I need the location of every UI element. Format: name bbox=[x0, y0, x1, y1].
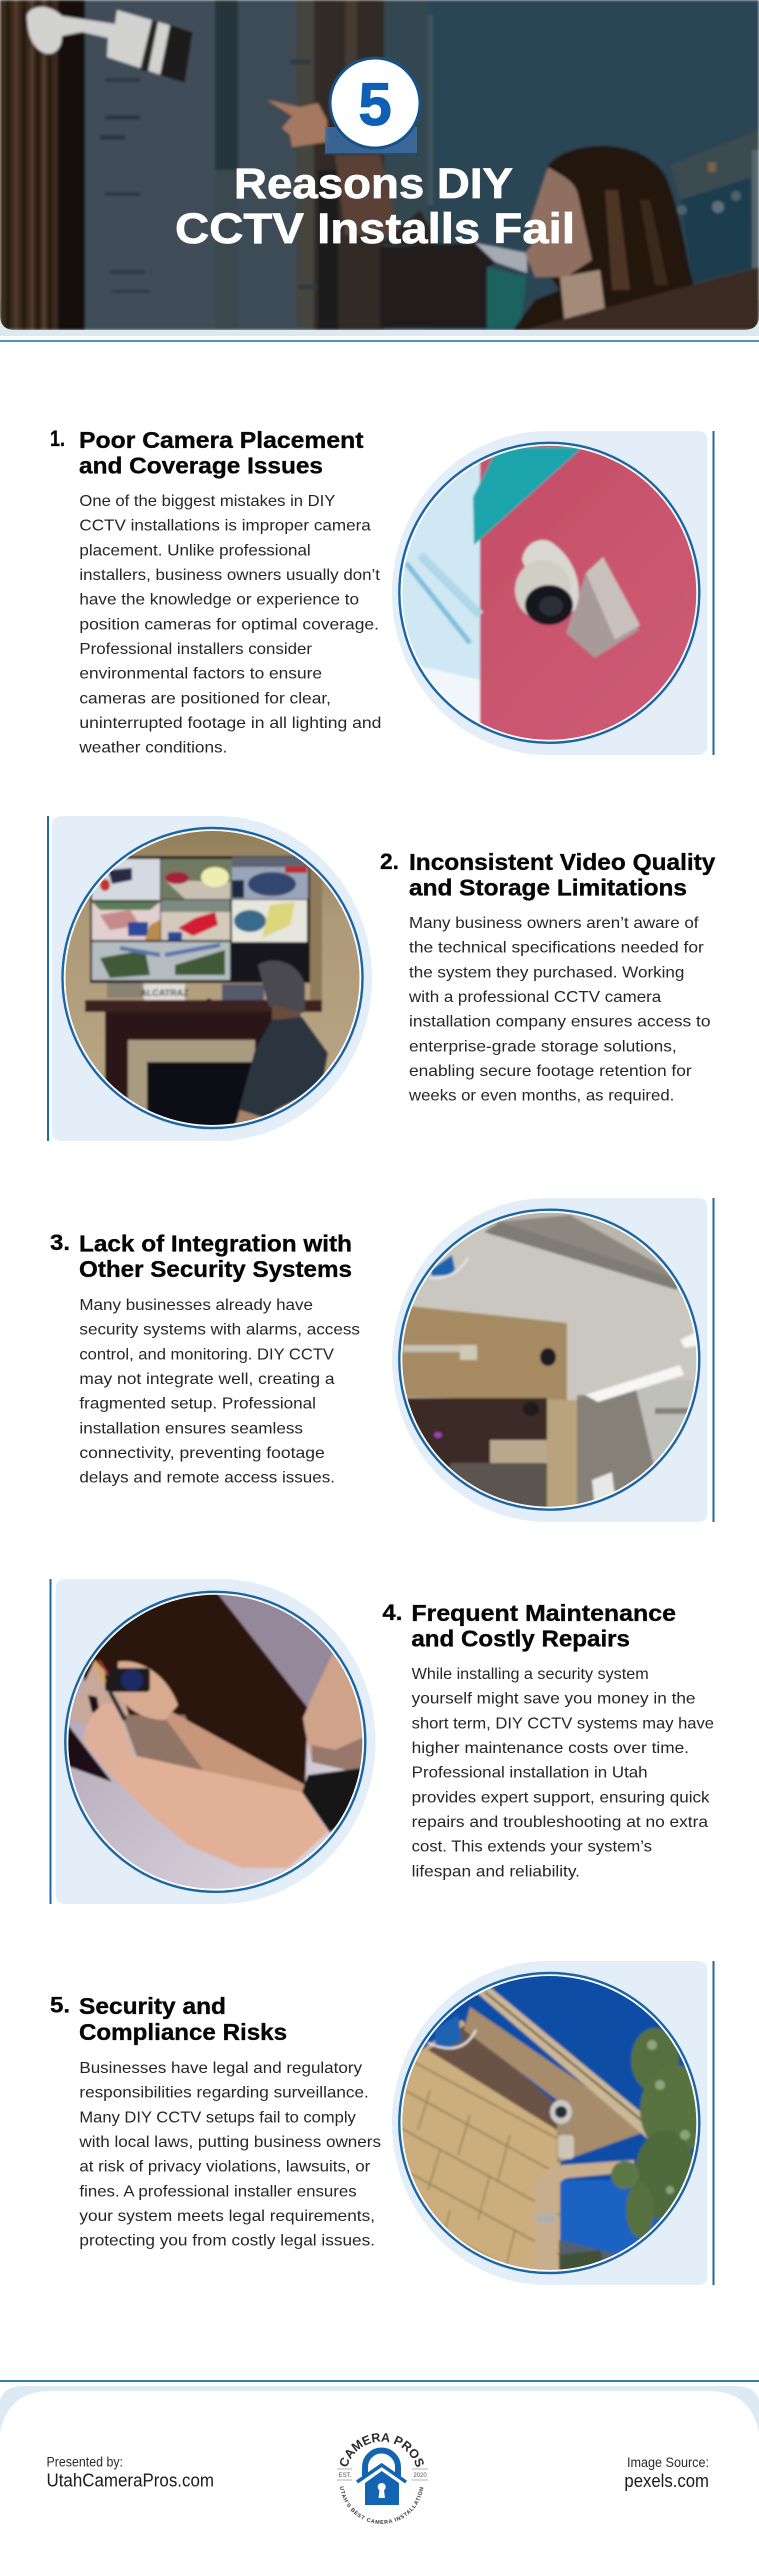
body text 1: One of the biggest mistakes in DIY bbox=[79, 493, 336, 510]
logo: Camera Pros: EST. bbox=[339, 2473, 352, 2479]
body text 2: with a professional CCTV camera bbox=[408, 989, 661, 1006]
body text 5: with local laws, putting business owners bbox=[78, 2134, 381, 2151]
body text 1: uninterrupted footage in all lighting and bbox=[79, 715, 381, 732]
title: Reasons DIY bbox=[234, 160, 513, 208]
body text 3: fragmented setup. Professional bbox=[79, 1396, 316, 1413]
footer bbox=[0, 2380, 759, 2524]
body text 3: delays and remote access issues. bbox=[79, 1470, 335, 1487]
hero photo: camera and woman pointing bbox=[0, 0, 759, 330]
presented by: Presented by: bbox=[46, 2455, 123, 2470]
body text 4: lifespan and reliability. bbox=[412, 1864, 580, 1880]
body text 3: Many businesses already have bbox=[79, 1297, 313, 1314]
body text 4: repairs and troubleshooting at no extra bbox=[412, 1814, 708, 1831]
image source bbox=[624, 2455, 709, 2491]
presented by: UtahCameraPros.com bbox=[46, 2470, 214, 2491]
body text 3: connectivity, preventing footage bbox=[79, 1445, 325, 1462]
heading 4: Frequent Maintenance bbox=[411, 1600, 676, 1626]
body text 5: fines. A professional installer ensures bbox=[79, 2183, 357, 2200]
heading 5 bbox=[50, 1993, 287, 2045]
body text 3: installation ensures seamless bbox=[79, 1420, 303, 1437]
body text 3: may not integrate well, creating a bbox=[79, 1371, 335, 1388]
body text 3 bbox=[79, 1297, 360, 1487]
heading 3 bbox=[50, 1230, 352, 1282]
body text 4: Professional installation in Utah bbox=[412, 1765, 648, 1782]
image panel 4 bbox=[50, 1579, 376, 1904]
body text 1: position cameras for optimal coverage. bbox=[79, 616, 379, 633]
body text 3: control, and monitoring. DIY CCTV bbox=[79, 1346, 334, 1363]
image panel 3 bbox=[392, 1198, 714, 1522]
heading 2 bbox=[380, 849, 715, 901]
body text 2: enterprise-grade storage solutions, bbox=[409, 1038, 677, 1055]
image panel 1 bbox=[392, 431, 714, 755]
logo: Camera Pros: UTAH'S BEST CAMERA INSTALLATION bbox=[340, 2486, 424, 2524]
photo: dome camera on red wall bbox=[402, 446, 696, 740]
heading 1: and Coverage Issues bbox=[79, 452, 323, 478]
logo: Camera Pros: CAMERA PROS bbox=[340, 2433, 424, 2467]
body text 2 bbox=[408, 915, 711, 1105]
body text 4: yourself might save you money in the bbox=[412, 1691, 696, 1708]
logo: Camera Pros: 2020 bbox=[413, 2473, 427, 2479]
body text 4: short term, DIY CCTV systems may have bbox=[412, 1715, 714, 1732]
body text 1: Professional installers consider bbox=[79, 641, 312, 658]
section 4: maintenance and repairs bbox=[50, 1579, 714, 1904]
body text 2: installation company ensures access to bbox=[409, 1014, 711, 1031]
heading 4: and Costly Repairs bbox=[411, 1626, 630, 1652]
body text 2: weeks or even months, as required. bbox=[408, 1088, 674, 1105]
heading 2: and Storage Limitations bbox=[409, 875, 687, 901]
heading 2: Inconsistent Video Quality bbox=[409, 849, 715, 875]
heading 3: Other Security Systems bbox=[79, 1256, 352, 1282]
body text 2: Many business owners aren’t aware of bbox=[409, 915, 699, 932]
heading 1: Poor Camera Placement bbox=[79, 427, 364, 453]
body text 2: the system they purchased. Working bbox=[409, 964, 684, 981]
heading 3: 3. bbox=[50, 1230, 70, 1255]
heading 5: Compliance Risks bbox=[79, 2019, 287, 2045]
logo: Camera Pros bbox=[337, 2433, 428, 2524]
body text 1: have the knowledge or experience to bbox=[79, 592, 359, 609]
image source: pexels.com bbox=[624, 2470, 709, 2491]
number badge bbox=[330, 58, 420, 148]
section 1: poor camera placement bbox=[50, 426, 714, 757]
body text 1: installers, business owners usually don’t bbox=[79, 567, 381, 584]
body text 1: weather conditions. bbox=[78, 740, 227, 757]
heading 4: 4. bbox=[382, 1600, 402, 1625]
number badge: 5 bbox=[358, 71, 392, 138]
body text 1: CCTV installations is improper camera bbox=[79, 518, 371, 535]
body text 5: protecting you from costly legal issues. bbox=[79, 2233, 375, 2250]
image panel 5 bbox=[392, 1961, 714, 2285]
title: CCTV Installs Fail bbox=[175, 205, 575, 253]
photo: man installing camera bbox=[60, 1590, 370, 1895]
section 3: lack of integration bbox=[50, 1198, 714, 1522]
heading 2: 2. bbox=[380, 849, 399, 874]
body text 5: at risk of privacy violations, lawsuits, or bbox=[79, 2159, 370, 2176]
body text 5: responsibilities regarding surveillance. bbox=[79, 2085, 369, 2102]
body text 5: your system meets legal requirements, bbox=[79, 2208, 375, 2225]
heading 5: Security and bbox=[79, 1993, 226, 2019]
body text 5 bbox=[78, 2060, 381, 2250]
body text 5: Businesses have legal and regulatory bbox=[79, 2060, 362, 2077]
body text 4 bbox=[412, 1666, 714, 1880]
heading 1 bbox=[50, 426, 364, 478]
body text 2: the technical specifications needed for bbox=[409, 940, 704, 957]
body text 5: Many DIY CCTV setups fail to comply bbox=[79, 2109, 356, 2126]
photo: man watching CCTV monitor: ALCATRAZ bbox=[140, 988, 189, 998]
panel: hero header bbox=[0, 0, 759, 336]
photo: camera under eave on brick house bbox=[402, 1976, 696, 2270]
body text 4: higher maintenance costs over time. bbox=[412, 1740, 689, 1757]
presented by bbox=[46, 2455, 214, 2491]
body text 2: enabling secure footage retention for bbox=[409, 1063, 692, 1080]
image panel 2 bbox=[47, 816, 372, 1141]
body text 4: provides expert support, ensuring quick bbox=[412, 1789, 710, 1806]
photo: man watching CCTV monitor bbox=[60, 825, 365, 1137]
body text 1: placement. Unlike professional bbox=[79, 542, 311, 559]
heading 4 bbox=[382, 1600, 676, 1652]
body text 3: security systems with alarms, access bbox=[79, 1322, 360, 1339]
body text 4: While installing a security system bbox=[412, 1666, 649, 1683]
heading 1: 1. bbox=[50, 426, 65, 451]
blue overlay block behind circle bbox=[325, 127, 417, 153]
body text 1: environmental factors to ensure bbox=[79, 666, 322, 683]
heading 3: Lack of Integration with bbox=[79, 1231, 352, 1257]
body text 1 bbox=[78, 493, 381, 757]
body text 4: cost. This extends your system’s bbox=[412, 1839, 652, 1856]
title bbox=[175, 160, 575, 253]
body text 1: cameras are positioned for clear, bbox=[79, 690, 331, 707]
heading 5: 5. bbox=[50, 1993, 70, 2018]
section 2: video quality and storage bbox=[47, 816, 715, 1141]
image source: Image Source: bbox=[627, 2455, 709, 2470]
photo: ceiling and cameras in store bbox=[395, 1205, 705, 1515]
band beneath hero bbox=[0, 300, 759, 336]
section 5: security and compliance bbox=[50, 1961, 714, 2285]
